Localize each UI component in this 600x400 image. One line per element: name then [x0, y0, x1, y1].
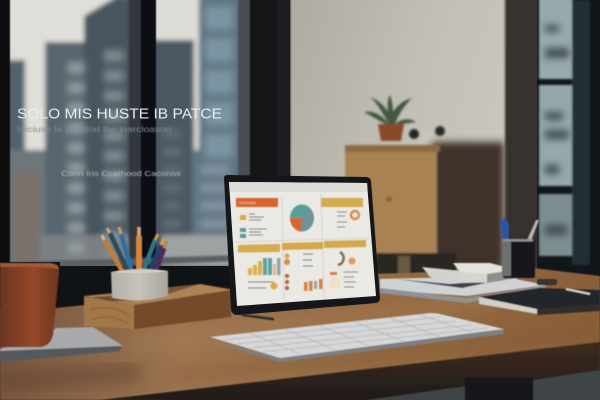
pie chart: [290, 204, 314, 232]
stylus: [241, 314, 274, 320]
tablet under mug: [0, 327, 123, 362]
right dark column: [505, 0, 538, 286]
cabinet: [345, 142, 504, 275]
background: office wall: [285, 0, 510, 290]
laptop showing dashboard: [224, 175, 380, 315]
subtitle: Iniciuse la ifnactod lhe inarcloason: [17, 124, 171, 134]
dashboard headers row two: [238, 240, 366, 252]
red mug: [0, 263, 59, 347]
title: SOLO MIS HUSTE IB PATCE: [17, 106, 222, 122]
notebooks and papers stack: [380, 263, 546, 303]
desk surface: [0, 268, 600, 400]
dashboard small widgets: [248, 252, 358, 291]
keyboard: [210, 313, 504, 362]
left window with blurred city buildings: [0, 0, 290, 312]
black notebook: [479, 288, 600, 315]
plant on cabinet: [364, 95, 445, 141]
dashboard panel: top left: Overview: [239, 200, 256, 205]
dashboard panel: top left: [236, 198, 278, 238]
dark pen cup: [500, 218, 557, 285]
pencil cup with pencils: [102, 227, 168, 301]
right window: [537, 0, 600, 285]
wooden pencil tray: [84, 284, 231, 329]
bar chart: [248, 258, 280, 275]
dashboard panel: top right: [321, 198, 363, 227]
caption: Coon Iris Ccathood Caconss: [61, 169, 181, 178]
